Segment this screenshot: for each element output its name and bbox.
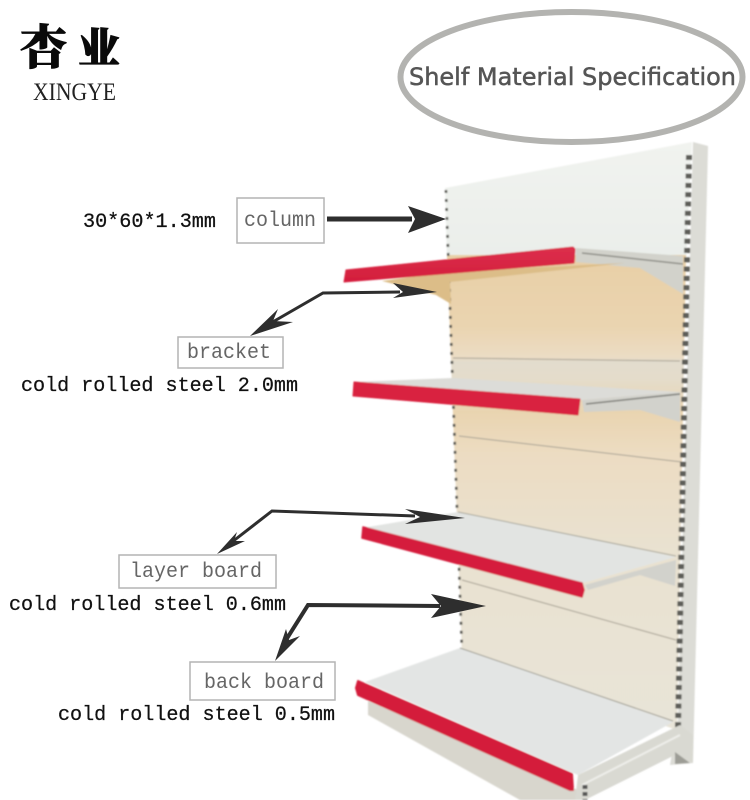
arrow: back board: [275, 594, 486, 661]
arrow: column: [327, 206, 446, 233]
arrow: bracket: [250, 283, 437, 336]
second shelf red edge: [353, 382, 580, 415]
top shelf underside: [382, 263, 625, 304]
label: column: column: [244, 210, 316, 233]
third shelf surface: [362, 512, 676, 583]
panel joints: [453, 358, 682, 640]
title ellipse: Shelf Material Specification: [409, 63, 736, 91]
spec: bracket: cold rolled steel 2.0mm: [21, 375, 298, 398]
right column post: [670, 142, 708, 765]
second shelf bracket: [582, 392, 680, 422]
lower back panel: [447, 255, 686, 730]
title ellipse: [400, 12, 742, 142]
base plinth: [368, 701, 585, 800]
bottom shelf surface: [365, 648, 673, 775]
logo: 杏: [20, 11, 67, 78]
upper bracket: [576, 248, 683, 294]
label: bracket: bracket: [187, 342, 271, 365]
spec: layer board: cold rolled steel 0.6mm: [9, 594, 286, 617]
third shelf red edge: [362, 527, 584, 597]
shelf unit photo illustration: [344, 142, 708, 800]
spec: back board: cold rolled steel 0.5mm: [58, 704, 335, 727]
logo: XINGYE: [33, 79, 116, 106]
spec: column: 30*60*1.3mm: [83, 211, 216, 234]
top shelf red edge: [344, 247, 575, 282]
left column holes: [446, 190, 462, 650]
arrow: layer board: [217, 509, 465, 554]
label: column: [237, 198, 324, 243]
label: back board: [190, 662, 335, 700]
label: bracket: [178, 337, 283, 368]
label: layer board: [119, 555, 276, 588]
label: layer board: layer board: [130, 561, 262, 584]
bottom shelf red edge: [356, 681, 573, 790]
label: back board: back board: [204, 672, 324, 695]
upper back panel: [445, 142, 692, 262]
base holes: [582, 785, 588, 800]
logo: [20, 11, 120, 106]
logo: 业: [78, 16, 120, 76]
right column holes: [678, 155, 689, 728]
third shelf bracket: [585, 560, 676, 590]
second shelf surface: [353, 378, 680, 400]
